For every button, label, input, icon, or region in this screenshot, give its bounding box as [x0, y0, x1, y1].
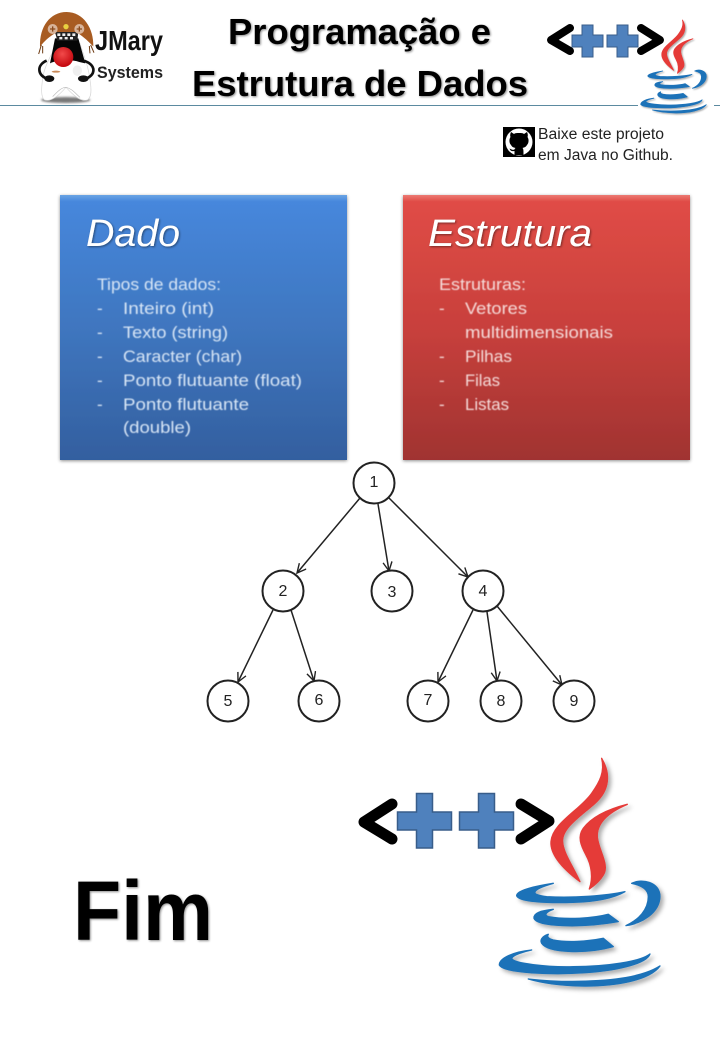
text: data types list: Inteiro (int) — [123, 299, 214, 318]
text: structures list: Estruturas: — [439, 275, 526, 294]
text: data types list: - — [97, 371, 103, 390]
panel heading: Dado: Dado — [86, 213, 180, 255]
text: data types list: - — [97, 299, 103, 318]
text: structures list: Listas — [465, 395, 509, 414]
icon: small Java logo — [638, 20, 714, 114]
header divider line — [0, 105, 720, 106]
icon: small ++ symbol — [551, 25, 660, 57]
text: GitHub download note: em Java no Github. — [538, 147, 673, 164]
panel: Estrutura — [403, 195, 690, 460]
text: data types list: - — [97, 347, 103, 366]
tree node labels: 9 — [570, 693, 579, 710]
text: data types list: - — [97, 323, 103, 342]
text: Fim: Fim — [73, 864, 213, 958]
tree arrows — [238, 498, 562, 685]
panel heading: Estrutura: Estrutura — [428, 213, 592, 255]
text: data types list: Caracter (char) — [123, 347, 242, 366]
text: data types list: Texto (string) — [123, 323, 228, 342]
text: structures list: - — [439, 395, 445, 414]
text: GitHub download note: Baixe este projeto — [538, 126, 664, 143]
text: structures list: multidimensionais — [465, 323, 613, 342]
title — [192, 11, 528, 104]
tree node labels: 4 — [479, 583, 488, 600]
icon: GitHub — [503, 127, 535, 157]
tree node labels: 5 — [224, 693, 233, 710]
text: structures list: Pilhas — [465, 347, 512, 366]
text: structures list: - — [439, 347, 445, 366]
tree node labels: 8 — [497, 693, 506, 710]
tree nodes — [208, 462, 594, 722]
text: data types list: - — [97, 395, 103, 414]
logo: JMary Systems — [39, 12, 163, 103]
icon: Duke mascot — [39, 12, 94, 103]
tree node labels — [224, 474, 579, 710]
text: data types list: Ponto flutuante — [123, 395, 249, 414]
text: data types list: Ponto flutuante (float) — [123, 371, 302, 390]
tree node labels: 6 — [315, 692, 324, 709]
text: data types list — [97, 275, 302, 437]
title line 2: Estrutura de Dados — [192, 63, 528, 104]
text: structures list: - — [439, 299, 445, 318]
tree node labels: 7 — [424, 692, 433, 709]
logo text: JMary: JMary — [95, 25, 163, 56]
text: structures list: Vetores — [465, 299, 527, 318]
tree node labels: 3 — [388, 584, 397, 601]
text: GitHub download note — [538, 126, 673, 164]
tree node labels: 1 — [370, 474, 379, 491]
tree node labels: 2 — [279, 583, 288, 600]
panel: Dado — [60, 195, 347, 460]
text: data types list: Tipos de dados: — [97, 275, 221, 294]
text: data types list: (double) — [123, 418, 191, 437]
chart: tree diagram — [208, 462, 594, 722]
text: structures list: - — [439, 371, 445, 390]
text: structures list — [439, 275, 613, 414]
text: structures list: Filas — [465, 371, 500, 390]
logo text: Systems: Systems — [97, 63, 163, 82]
icon: large ++ symbol — [364, 794, 549, 848]
title line 1: Programação e — [228, 11, 491, 52]
icon: large Java logo — [499, 758, 660, 986]
